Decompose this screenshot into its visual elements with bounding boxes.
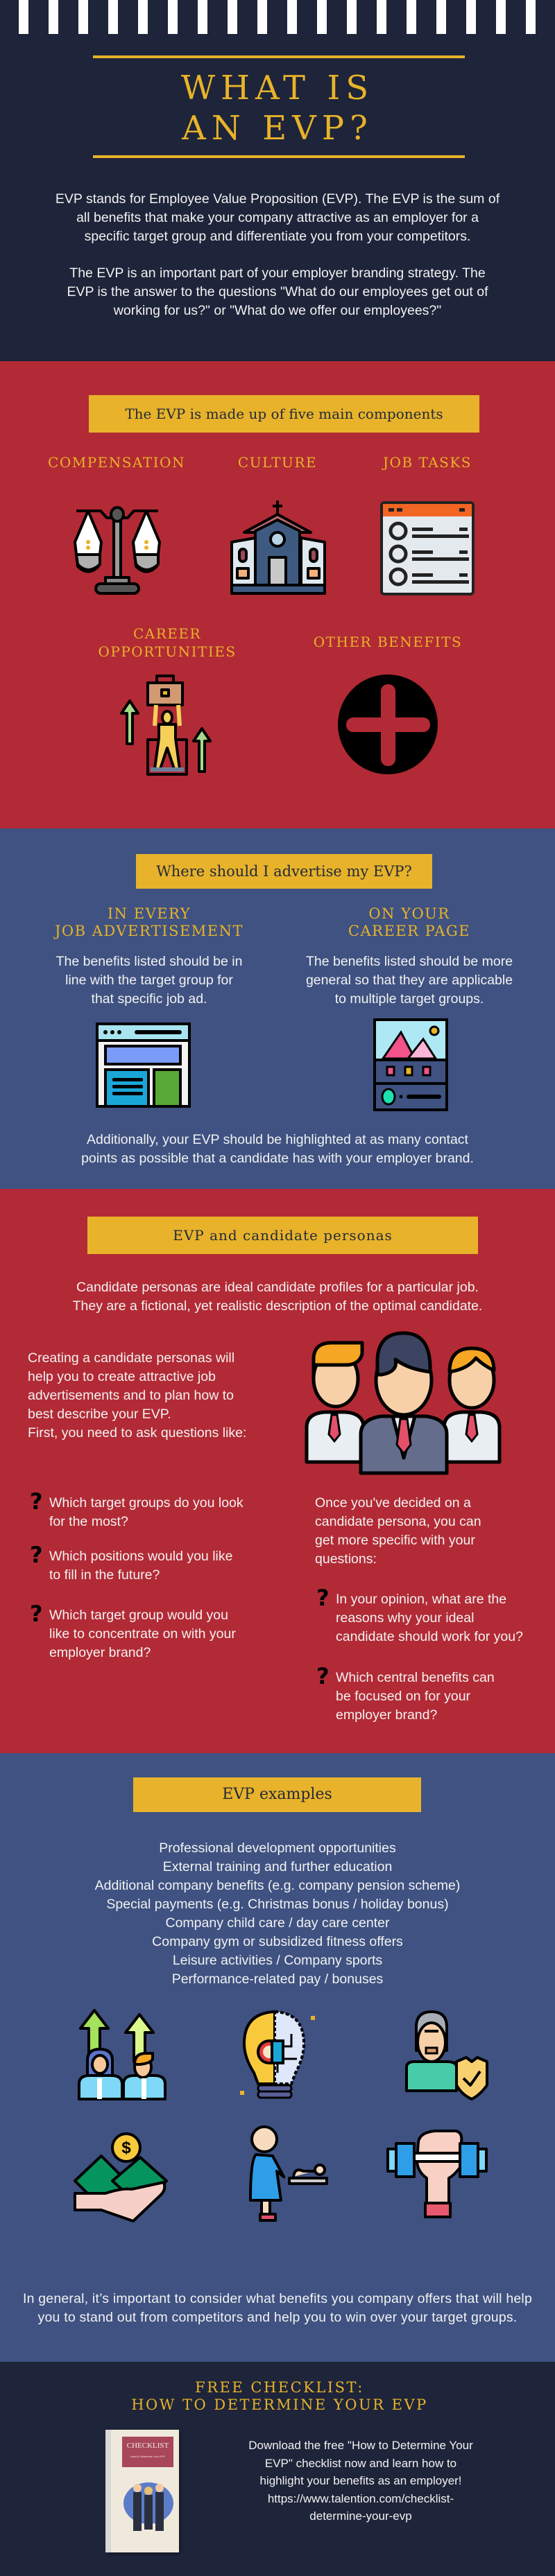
label: culture: CULTURE [238,454,317,471]
label: career opportunities: OPPORTUNITIES [98,643,237,660]
heading: FREE CHECKLIST: [195,2379,364,2396]
question 5: employer brand? [336,1707,437,1723]
text: line with the target group for [65,973,233,988]
icon: church [230,501,326,595]
examples list: Additional company benefits (e.g. company pension scheme) [95,1878,460,1893]
right text [315,1495,481,1567]
column: job advertisement [53,905,244,1007]
download text: https://www.talention.com/checklist- [268,2491,454,2505]
question list left: ? [30,1488,43,1515]
section: five components [0,361,555,828]
icon: growth people [78,2009,166,2100]
title: AN EVP? [182,109,373,148]
text: The benefits listed should be more [306,954,513,969]
label: other benefits: OTHER BENEFITS [314,634,462,650]
left text: Creating a candidate personas will [28,1350,234,1366]
intro text: Candidate personas are ideal candidate profiles for a particular job. [76,1280,479,1295]
icon: mother and baby [249,2125,328,2222]
label: compensation: COMPENSATION [48,454,185,471]
download text: Download the free "How to Determine Your [248,2439,473,2452]
download text: determine-your-evp [309,2509,412,2523]
title [181,69,374,148]
left text: advertisements and to plan how to [28,1388,234,1403]
section: where to advertise [0,828,555,1189]
left text: First, you need to ask questions like: [28,1425,246,1441]
download text: EVP" checklist now and learn how to [265,2457,456,2469]
question list left: ? [30,1542,43,1568]
examples list: Company gym or subsidized fitness offers [152,1934,403,1949]
icon: dumbbell [386,2130,488,2218]
examples list: Special payments (e.g. Christmas bonus / holiday bonus) [106,1897,449,1912]
label: career opportunities [98,625,237,660]
section: EVP examples [0,1753,555,2362]
question 4: In your opinion, what are the [336,1592,506,1607]
heading [348,905,470,939]
intro paragraph 1 [56,191,500,244]
decorative stripes [19,0,536,34]
heading: HOW TO DETERMINE YOUR EVP [131,2396,428,2413]
closing text: points as possible that a candidate has with your employer brand. [81,1151,474,1166]
heading box: EVP examples [222,1786,332,1803]
question 2: Which positions would you like [49,1549,232,1564]
examples list [94,1840,460,1987]
examples list: Performance-related pay / bonuses [172,1972,383,1987]
heading: IN EVERY [108,905,191,922]
examples list: External training and further education [163,1859,392,1874]
download text: highlight your benefits as an employer! [259,2474,462,2487]
heading box [87,1217,478,1254]
question list right: ? [316,1585,330,1611]
text: to multiple target groups. [335,991,484,1007]
question 4: reasons why your ideal [336,1610,474,1626]
examples list: Professional development opportunities [159,1840,396,1856]
left text: help you to create attractive job [28,1369,216,1384]
book cover: CHECKLIST [127,2442,169,2450]
heading box: Where should I advertise my EVP? [156,863,412,880]
text: The benefits listed should be in [56,954,242,969]
text [56,954,242,1007]
heading: ON YOUR [368,905,450,922]
heading box: The EVP is made up of five main components [125,406,443,422]
right text: candidate persona, you can [315,1514,481,1529]
text [306,954,513,1007]
title: WHAT IS [181,69,374,107]
heading [53,905,244,939]
section: candidate personas [0,1189,555,1753]
intro paragraph 2: working for us?" or "What do we offer our employees?" [114,303,441,318]
closing text: In general, it’s important to consider what benefits you company offers that will help [23,2291,532,2306]
right text: questions: [315,1551,377,1567]
right text: Once you've decided on a [315,1495,471,1511]
heading box [136,854,432,889]
intro paragraph 2: EVP is the answer to the questions "What do our employees get out of [67,284,488,299]
book cover [105,2430,179,2552]
icon: plus circle [338,675,438,774]
icon: career ladder [119,675,212,776]
icon: senior with shield [405,2010,488,2100]
question list left: ? [30,1601,43,1627]
section: free checklist [0,2362,555,2576]
icon: scale [74,506,161,595]
question 3: like to concentrate on with your [49,1626,236,1642]
column: career page [306,905,513,1007]
closing text: Additionally, your EVP should be highlighted at as many contact [87,1132,468,1147]
question 4: candidate should work for you? [336,1629,523,1644]
question 5: be focused on for your [336,1689,470,1704]
closing text [81,1132,474,1166]
icon: three people [305,1331,501,1475]
question 3: employer brand? [49,1645,151,1660]
intro text [73,1280,482,1314]
heading box: EVP and candidate personas [173,1227,393,1244]
intro paragraph 2: The EVP is an important part of your employer branding strategy. The [69,266,486,281]
question 1: Which target groups do you look [49,1495,244,1511]
intro paragraph 1: all benefits that make your company attractive as an employer for a [76,210,479,225]
left text [28,1350,246,1441]
intro paragraph 1: specific target group and differentiate you from your competitors. [85,229,470,244]
label: job tasks: JOB TASKS [383,454,472,471]
heading: JOB ADVERTISEMENT [55,923,244,939]
intro paragraph 2 [67,266,488,318]
question list right: ? [316,1663,330,1689]
left text: best describe your EVP. [28,1407,171,1422]
icon: money hand: $ [121,2139,131,2157]
book cover: How to Determine Your EVP [130,2455,165,2458]
question 1: for the most? [49,1514,128,1529]
section: intro [0,0,555,361]
icon: money hand [74,2132,168,2222]
question 4 [316,1585,523,1644]
heading [131,2379,428,2413]
text: general so that they are applicable [306,973,513,988]
question 2: to fill in the future? [49,1567,160,1583]
intro text: They are a fictional, yet realistic description of the optimal candidate. [73,1298,482,1314]
heading: CAREER PAGE [348,923,470,939]
examples list: Leisure activities / Company sports [173,1953,382,1968]
icon: checklist [380,501,475,595]
label: career opportunities: CAREER [133,625,201,642]
icon: career page card [373,1018,448,1111]
intro paragraph 1: EVP stands for Employee Value Proposition (EVP). The EVP is the sum of [56,191,500,207]
question 3: Which target group would you [49,1608,228,1623]
closing text: you to stand out from competitors and help you to win over your target groups. [38,2310,517,2325]
question 3 [30,1601,236,1660]
right text: get more specific with your [315,1533,475,1548]
question list left [30,1488,244,1660]
heading box [89,395,479,433]
heading box [133,1777,421,1812]
closing text [23,2291,532,2325]
question 5 [316,1663,495,1723]
question 5: Which central benefits can [336,1670,495,1685]
icon: browser window [96,1022,191,1108]
download text [248,2439,473,2523]
question 2 [30,1542,232,1583]
question 1 [30,1488,244,1529]
text: that specific job ad. [92,991,207,1007]
examples list: Company child care / day care center [165,1915,390,1931]
icon: light bulb [240,2010,315,2099]
question list right [316,1585,523,1723]
